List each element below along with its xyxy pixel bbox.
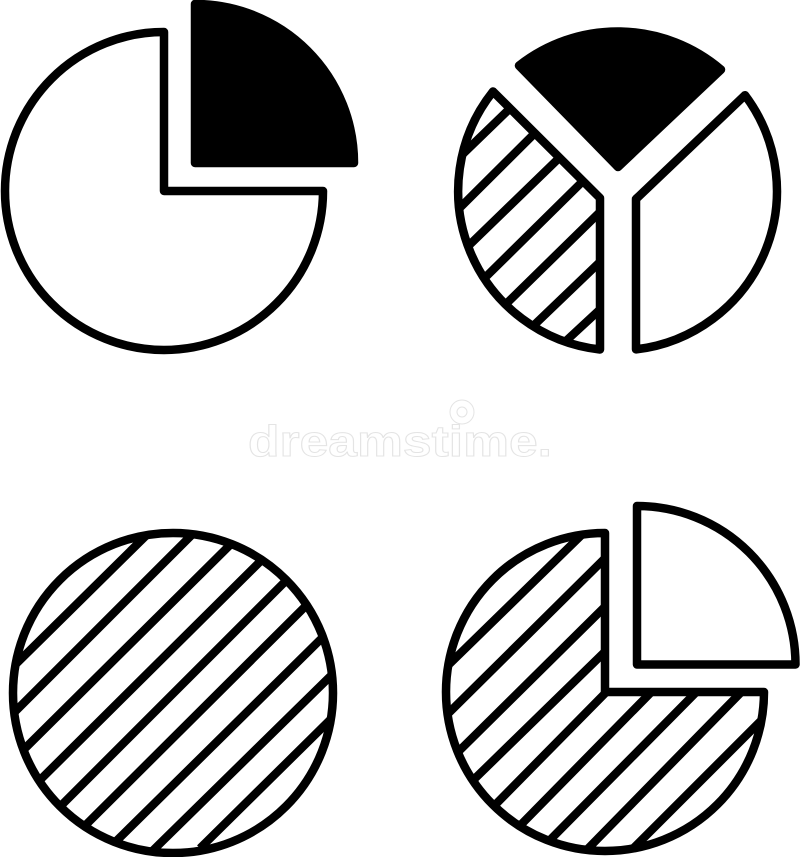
black quarter slice <box>195 4 354 163</box>
hatched left slice <box>458 92 603 350</box>
black top slice <box>519 32 721 167</box>
outlined right slice <box>636 95 777 349</box>
watermark <box>248 400 552 466</box>
hatched three-quarter slice <box>446 532 764 852</box>
watermark: dreamstime. <box>248 417 552 466</box>
icon: pie chart with three slices <box>458 32 777 349</box>
icon: pie chart with black quarter slice <box>5 4 354 350</box>
outlined three-quarter slice <box>5 32 323 350</box>
outlined quarter slice <box>637 506 796 664</box>
circle outline <box>13 533 333 853</box>
icon: fully hatched circle <box>13 533 333 853</box>
icon: hatched pie chart with outlined quarter slice <box>446 506 796 852</box>
